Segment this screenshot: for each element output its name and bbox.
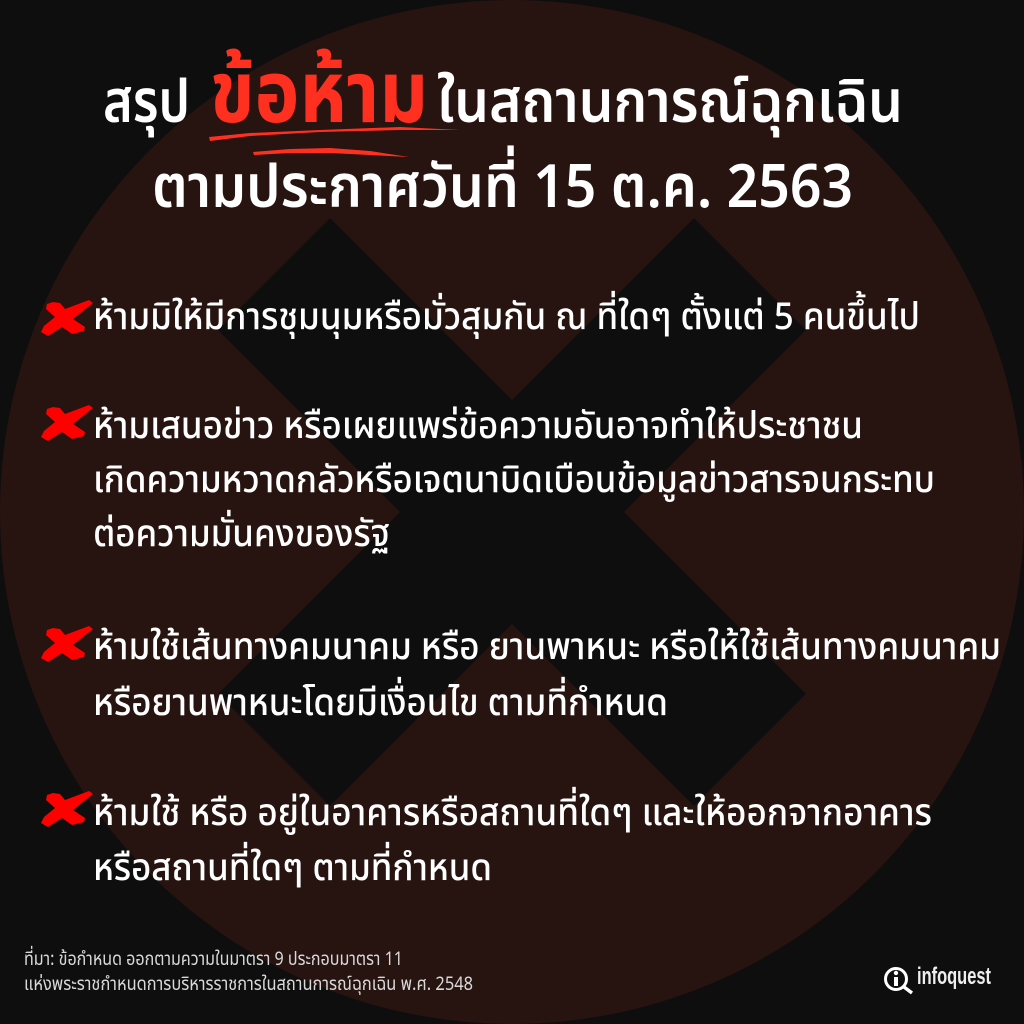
- title: ข้อห้าม: [210, 31, 428, 161]
- rule 4: [41, 785, 932, 897]
- brush underlines: [209, 127, 460, 157]
- logo: infoquest: infoquest: [917, 963, 991, 990]
- icon: red cross 1: [41, 300, 93, 336]
- title: [103, 31, 903, 234]
- rule 2: ห้ามเสนอข่าว หรือเผยแพร่ข้อความอันอาจทำให้ประชาชน: [93, 398, 863, 455]
- source note: แห่งพระราชกำหนดการบริหารราชการในสถานการณ์ฉุกเฉิน พ.ศ. 2548: [24, 970, 473, 999]
- logo: infoquest: [886, 963, 991, 993]
- rule 3: [41, 619, 1001, 732]
- rule 4: ห้ามใช้ หรือ อยู่ในอาคารหรือสถานที่ใดๆ และให้ออกจากอาคาร: [93, 785, 932, 842]
- rule 2: เกิดความหวาดกลัวหรือเจตนาบิดเบือนข้อมูลข่าวสารจนกระทบ: [93, 452, 935, 509]
- title: สรุป: [103, 58, 190, 149]
- rule 2: [41, 398, 935, 563]
- title: ในสถานการณ์ฉุกเฉิน: [437, 58, 903, 149]
- rule 3: หรือยานพาหนะโดยมีเงื่อนไข ตามที่กำหนด: [93, 675, 668, 732]
- source note: ที่มา: ข้อกำหนด ออกตามความในมาตรา 9 ประกอบมาตรา 11: [24, 945, 403, 974]
- rule 2: ต่อความมั่นคงของรัฐ: [93, 506, 390, 563]
- icon: red cross 4: [41, 791, 93, 827]
- title: ตามประกาศวันที่ 15 ต.ค. 2563: [152, 143, 853, 234]
- source note: [24, 945, 473, 999]
- icon: red cross 3: [41, 626, 93, 662]
- icon: red cross 2: [41, 405, 93, 441]
- rule 4: หรือสถานที่ใดๆ ตามที่กำหนด: [93, 840, 492, 897]
- rule 1: ห้ามมิให้มีการชุมนุมหรือมั่วสุมกัน ณ ที่ใดๆ ตั้งแต่ 5 คนขึ้นไป: [93, 289, 920, 346]
